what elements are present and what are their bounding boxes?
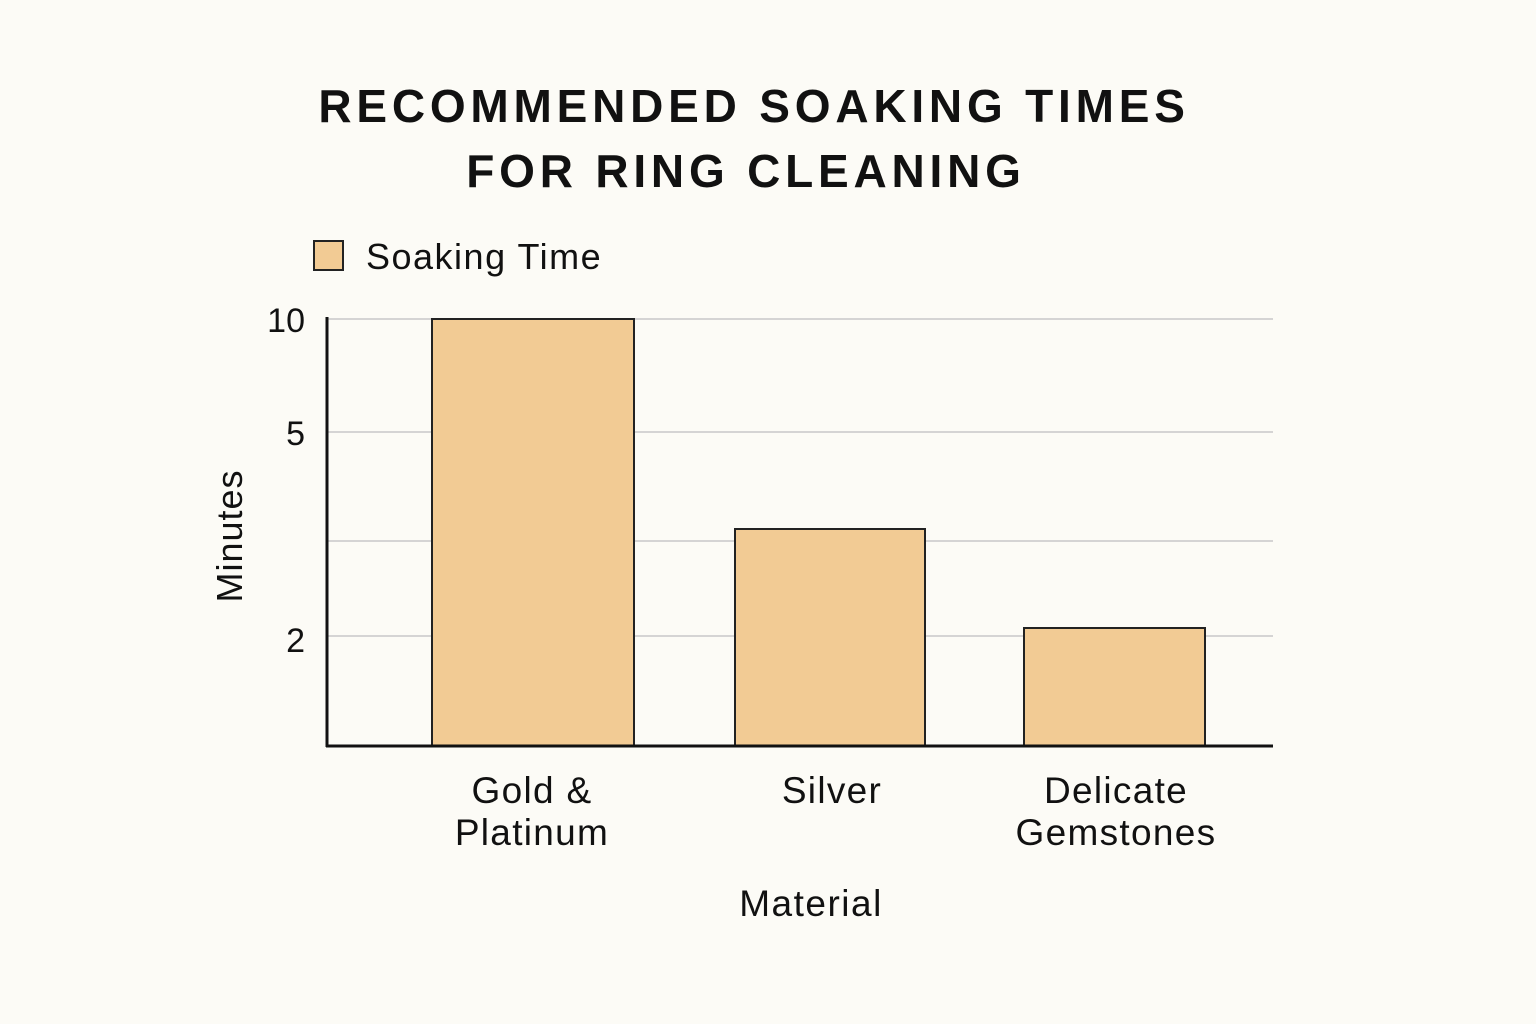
x axis labels: Platinum [455,812,609,853]
x axis labels: Delicate [1044,770,1188,811]
y axis labels [267,302,305,660]
axes [326,317,1273,747]
legend: Soaking Time [366,236,602,277]
x axis labels: Gemstones [1016,812,1216,853]
title [318,80,1190,197]
y axis labels: 2 [286,622,305,660]
x axis labels: Silver [782,770,882,811]
bar: silver [735,529,925,746]
y axis labels: 5 [286,415,305,453]
x axis labels [455,770,1216,853]
x axis labels: Gold & [472,770,592,811]
bar: delicate gemstones [1024,628,1205,746]
y axis title: Minutes [209,469,250,603]
title: FOR RING CLEANING [466,145,1026,197]
bar: gold & platinum [432,319,634,746]
y axis labels: 10 [267,302,305,340]
x axis title: Material [739,883,883,924]
title: RECOMMENDED SOAKING TIMES [318,80,1190,132]
gridlines [327,319,1273,636]
